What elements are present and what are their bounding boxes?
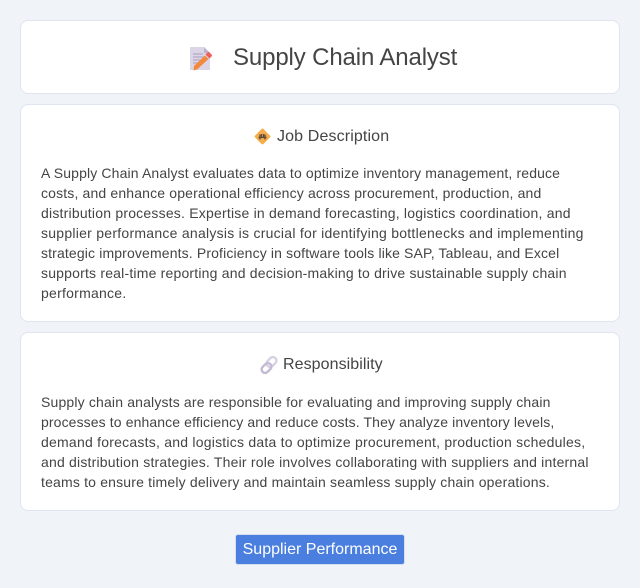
heading: responsibility: Responsibility (283, 356, 383, 373)
panel: header card (20, 20, 620, 94)
button: supplier performance (235, 534, 405, 565)
text block: responsibility: Supply chain analysts are responsible for evaluating and improving supply chain (41, 394, 551, 410)
title: Supply Chain Analyst (233, 44, 457, 71)
text block: job description: supports real-time reporting and decision-making to drive sustainable supply chain (41, 265, 567, 281)
text block: responsibility: and distribution strategies. Their role involves collaborating with suppliers and internal (41, 454, 589, 470)
text block: responsibility: processes to enhance efficiency and reduce costs. They analyze inventory levels, (41, 414, 554, 430)
text block: job description: supplier performance analysis is crucial for identifying bottlenecks and implementing (41, 225, 584, 241)
text block: responsibility: teams to ensure timely delivery and maintain seamless supply chain operations. (41, 474, 550, 490)
panel: responsibility (20, 332, 620, 511)
button: supplier performance: Supplier Performance (243, 541, 397, 558)
text block: job description: distribution processes. Expertise in demand forecasting, logistics coordination, and (41, 205, 571, 221)
text block: job description: A Supply Chain Analyst evaluates data to optimize inventory management, reduce (41, 165, 560, 181)
text block: job description: costs, and enhance operational efficiency across procurement, production, and (41, 185, 541, 201)
icon: orange diamond sign (254, 128, 270, 144)
icon: document with pencil (190, 47, 212, 70)
text block: responsibility: demand forecasts, and logistics data to optimize procurement, production schedules, (41, 434, 585, 450)
text block: job description: performance. (41, 285, 126, 301)
text block: job description: strategic improvements. Proficiency in software tools like SAP, Tableau, and Excel (41, 245, 559, 261)
heading: job description: Job Description (277, 128, 389, 145)
panel: job description (20, 104, 620, 322)
icon: chain link (260, 356, 278, 374)
text block: responsibility (41, 394, 589, 490)
text block: job description (41, 165, 584, 301)
